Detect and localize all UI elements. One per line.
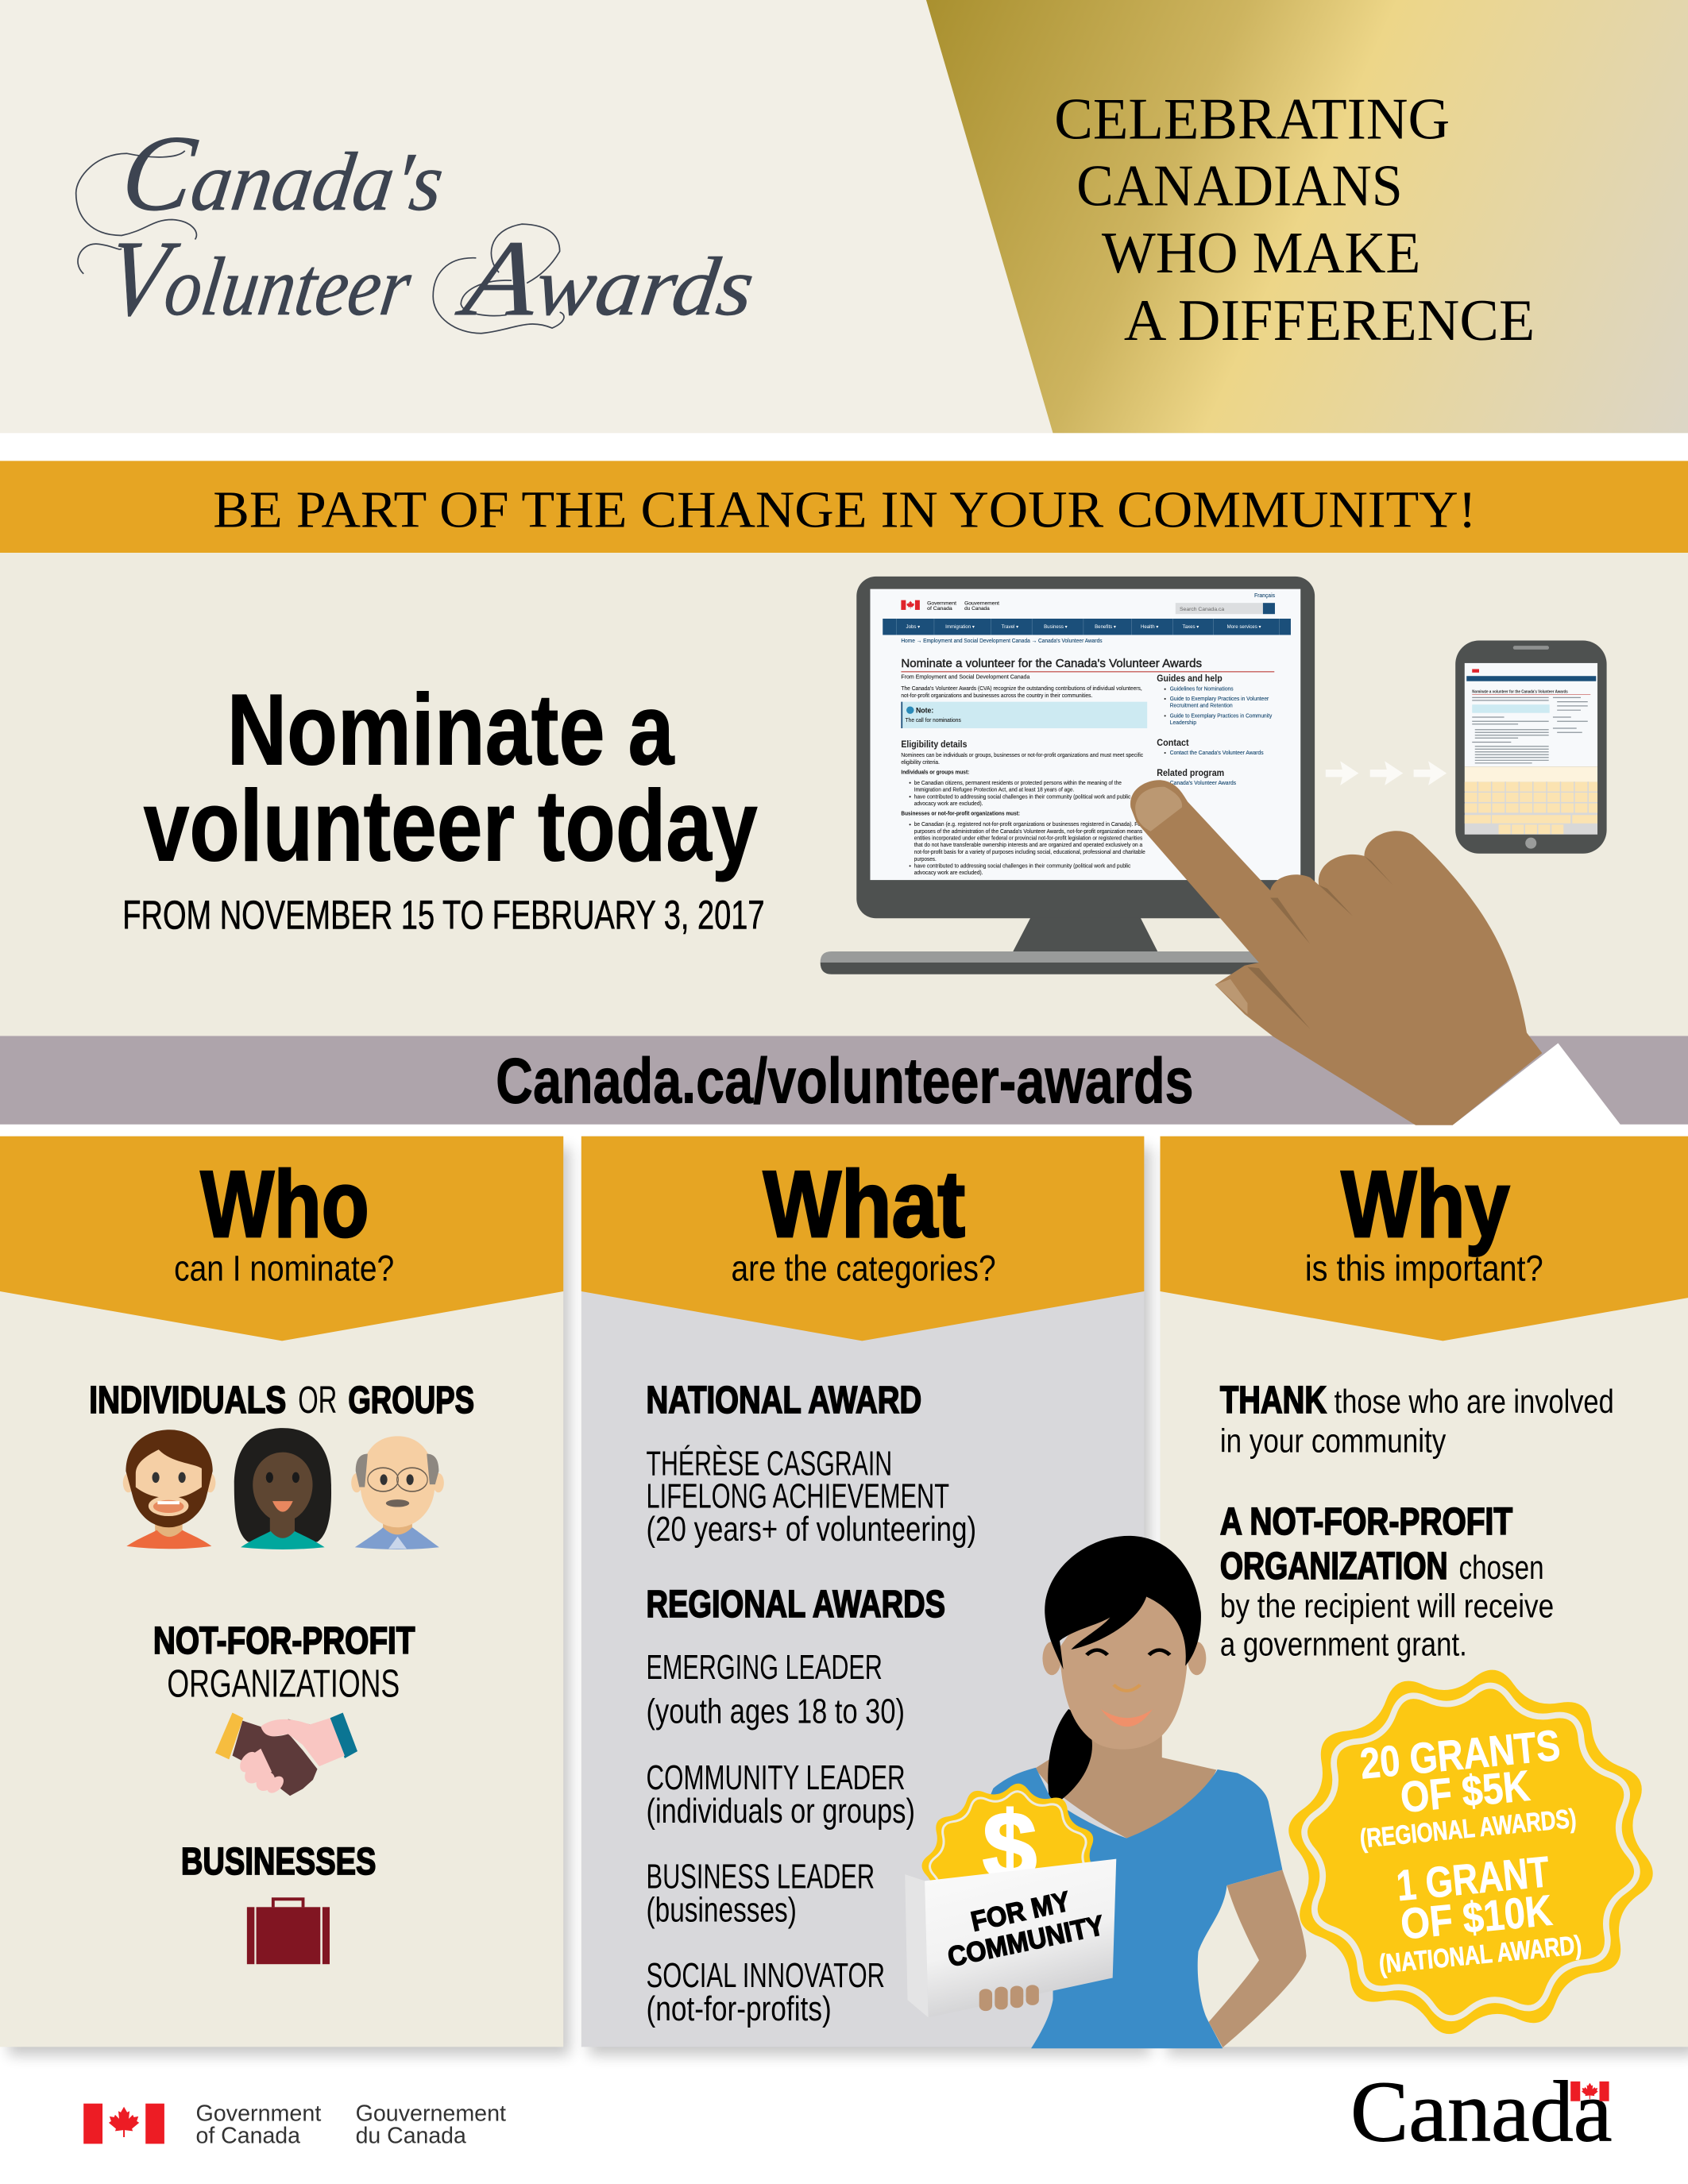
web page screenshot: that do not have transferable ownership interests and are organized and operated exclusively on a [914, 841, 1143, 848]
web page screenshot: Travel ▾ [1002, 624, 1018, 630]
web page screenshot: advocacy work are excluded). [914, 869, 983, 876]
hair [1045, 1536, 1201, 1669]
text: 1 grant of 10K: 1 GRANT [1394, 1847, 1551, 1910]
web page screenshot: entities incorporated under either federal or provincial not-for-profit legislation or registered charities [914, 834, 1143, 841]
text: businesses: BUSINESSES [181, 1841, 376, 1883]
text: 20 grants of 5K [1358, 1721, 1578, 1854]
web page screenshot: advocacy work are excluded). [914, 800, 983, 807]
web page screenshot [870, 589, 1300, 880]
text: regional awards: REGIONAL AWARDS [647, 1584, 945, 1626]
web page screenshot: purposes of the administration of the Canada's Volunteer Awards, not-for-profit organization means [914, 828, 1143, 835]
panel: why [1160, 1136, 1688, 2055]
text: not-for-profit organizations: NOT-FOR-PROFIT [153, 1620, 415, 1662]
web page screenshot: Canada's Volunteer Awards [1170, 779, 1236, 786]
text: national award: NATIONAL AWARD [647, 1379, 921, 1422]
tagline: celebrating Canadians: CANADIANS [1076, 153, 1403, 218]
gift bag [905, 1859, 1116, 2017]
text: regional awards: (businesses) [647, 1892, 797, 1930]
subheading: can I nominate: can I nominate? [174, 1248, 394, 1289]
icon: bearded man [123, 1430, 215, 1549]
band: website address: Canada.ca/volunteer-awards [496, 1046, 1194, 1117]
eyes [1087, 1650, 1170, 1655]
web page screenshot: The call for nominations [906, 716, 961, 723]
web page screenshot: Related program [1157, 769, 1224, 778]
web page screenshot: Government [927, 602, 956, 607]
panel: header banner [0, 0, 1688, 433]
nose [1114, 1684, 1140, 1691]
text: not-for-profit organizations: ORGANIZATIONS [167, 1663, 400, 1706]
text: individuals or groups: OR [298, 1379, 337, 1422]
arrows: monitor to phone [1326, 761, 1447, 785]
text: not-for-profit grant: ORGANIZATION [1220, 1545, 1448, 1588]
web page screenshot: Guides and help [1157, 674, 1223, 684]
web page screenshot: Business ▾ [1044, 624, 1068, 630]
web page screenshot: Home → Employment and Social Development Canada → Canada's Volunteer Awards [901, 637, 1103, 644]
web page screenshot: Businesses or not-for-profit organizations must: [901, 810, 1020, 817]
web page screenshot: Recruitment and Retention [1170, 702, 1233, 709]
icon: woman with dark hair [234, 1428, 331, 1549]
band: website address [0, 1036, 1688, 1125]
web page screenshot: eligibility criteria. [901, 758, 940, 766]
text: government names: of Canada [196, 2123, 300, 2148]
web page screenshot: du Canada [964, 607, 990, 612]
banner: be part of the change [0, 461, 1688, 553]
web page screenshot: not-for-profit organizations and businesses across the country in their communities. [901, 692, 1092, 699]
coin badge with dollar sign [914, 1776, 1108, 1970]
web page screenshot: Health ▾ [1141, 624, 1158, 630]
icons: three faces [123, 1428, 444, 1549]
text: not-for-profit grant [1220, 1501, 1554, 1663]
icon: handshake [215, 1712, 357, 1796]
text: national award: THÉRÈSE CASGRAIN [647, 1445, 892, 1483]
text: national award: (20 years+ of volunteering) [647, 1511, 976, 1549]
footer: Government of Canada signature [83, 2101, 506, 2148]
web page screenshot: have contributed to addressing social challenges in their community (political work and public [914, 793, 1131, 800]
panel: who [0, 1136, 570, 2055]
web page screenshot: Contact [1157, 739, 1189, 748]
illustration: pointing hand [1130, 780, 1620, 1125]
text: individuals or groups: INDIVIDUALS [89, 1379, 286, 1422]
text: regional awards: BUSINESS LEADER [647, 1858, 875, 1896]
web page screenshot: Guide to Exemplary Practices in Volunteer [1170, 695, 1269, 702]
right ear [1188, 1642, 1206, 1675]
illustration: smartphone: Nominate a volunteer for the Canada's Volunteer Awards [1472, 689, 1568, 694]
text: thank those involved: those who are involved [1335, 1383, 1614, 1420]
heading: nominate a volunteer today: volunteer today [144, 770, 758, 882]
fingers [979, 1985, 1039, 2011]
web page screenshot: Gouvernement [964, 602, 999, 607]
web page screenshot: Taxes ▾ [1183, 624, 1199, 630]
heading: who: Who [200, 1152, 369, 1257]
text: 20 grants of 5K: (REGIONAL AWARDS) [1358, 1804, 1578, 1854]
blue shirt [952, 1768, 1282, 2048]
illustration: smartphone [1455, 641, 1607, 854]
text: regional awards: (not-for-profits) [647, 1990, 832, 2028]
heading: nominate a volunteer today: Nominate a [227, 673, 675, 786]
web page screenshot: Nominees can be individuals or groups, businesses or not-for-profit organizations and must meet specific [901, 751, 1143, 758]
web page screenshot: Jobs ▾ [906, 624, 920, 630]
text: individuals or groups: GROUPS [348, 1379, 474, 1422]
text: national award [647, 1379, 976, 1549]
web page screenshot: be Canadian citizens, permanent residents or protected persons within the meaning of the [914, 779, 1122, 786]
tagline: celebrating Canadians [1054, 86, 1535, 353]
text: regional awards: (individuals or groups) [647, 1792, 915, 1831]
web page screenshot: Immigration ▾ [945, 624, 975, 630]
left ear [1042, 1642, 1061, 1675]
text: regional awards: EMERGING LEADER [647, 1649, 883, 1687]
text: regional awards: (youth ages 18 to 30) [647, 1693, 905, 1731]
heading: why: Why [1341, 1152, 1510, 1257]
text: 1 grant of 10K [1377, 1847, 1583, 1979]
icon: briefcase [247, 1897, 330, 1964]
web page screenshot: Guidelines for Nominations [1170, 685, 1234, 693]
illustration: desktop monitor with web page [821, 577, 1315, 974]
web page screenshot: Nominate a volunteer for the Canada's Volunteer Awards [901, 658, 1202, 670]
web page screenshot: Benefits ▾ [1095, 624, 1116, 630]
subheading: is this important: is this important? [1305, 1248, 1543, 1289]
footer: Canada wordmark: Canada [1350, 2064, 1613, 2160]
web page screenshot: Immigration and Refugee Protection Act, and at least 18 years of age. [914, 786, 1074, 793]
banner: be part of the change: BE PART OF THE CHANGE IN YOUR COMMUNITY! [213, 480, 1476, 538]
text: regional awards: COMMUNITY LEADER [647, 1759, 906, 1797]
text: thank those involved [1220, 1379, 1614, 1459]
heading: nominate a volunteer today [144, 673, 758, 882]
web page screenshot: Leadership [1170, 719, 1196, 726]
tagline: celebrating Canadians: WHO MAKE [1102, 220, 1420, 285]
subheading: are the categories: are the categories? [731, 1248, 996, 1289]
text: not-for-profit grant: a government grant. [1220, 1626, 1467, 1663]
arm [1209, 1870, 1306, 2047]
text: not-for-profit grant: chosen [1459, 1549, 1544, 1586]
web page screenshot: of Canada [927, 607, 953, 612]
web page screenshot: More services ▾ [1227, 624, 1261, 630]
icon: wordmark flag [1570, 2082, 1609, 2101]
text: thank those involved: in your community [1220, 1422, 1446, 1459]
title: Canada's Volunteer Awards [76, 113, 763, 338]
title: Canada's Volunteer Awards: Awards [451, 218, 763, 338]
text: government names: du Canada [356, 2123, 466, 2148]
bag label: FOR MY [968, 1885, 1073, 1938]
title: Canada's Volunteer Awards: Volunteer [100, 218, 420, 338]
tagline: celebrating Canadians: CELEBRATING [1054, 86, 1450, 151]
web page screenshot: Eligibility details [901, 740, 967, 750]
heading: what: What [763, 1152, 965, 1257]
web page screenshot: Note: [916, 706, 933, 714]
smile [1101, 1709, 1153, 1727]
title: Canada's Volunteer Awards: Canada's [115, 113, 452, 233]
text: regional awards [647, 1584, 945, 2028]
web page screenshot: The Canada's Volunteer Awards (CVA) recognize the outstanding contributions of individual volunteers, [901, 685, 1142, 692]
text: 1 grant of 10K: (NATIONAL AWARD) [1377, 1931, 1583, 1979]
text: not-for-profit grant: A NOT-FOR-PROFIT [1220, 1501, 1512, 1543]
text: government names: Government [196, 2101, 321, 2126]
web page screenshot: Individuals or groups must: [901, 768, 969, 775]
web page screenshot: Français [1254, 592, 1275, 599]
badge: grant amounts [1265, 1646, 1677, 2058]
text: 20 grants of 5K: 20 GRANTS [1358, 1721, 1562, 1788]
bag label: COMMUNITY [945, 1910, 1107, 1973]
panel: what [581, 1136, 1150, 2055]
text: regional awards: SOCIAL INNOVATOR [647, 1957, 885, 1995]
text: 20 grants of 5K: OF $5K [1398, 1761, 1532, 1822]
text: not-for-profit organizations [153, 1620, 415, 1706]
text: government names: Gouvernement [356, 2101, 506, 2126]
text: national award: LIFELONG ACHIEVEMENT [647, 1478, 949, 1516]
neck and chest [1035, 1731, 1216, 1839]
panel: nominate section background [0, 553, 1688, 1036]
ponytail [1048, 1709, 1092, 1800]
web page screenshot: From Employment and Social Development Canada [901, 673, 1030, 680]
web page screenshot: purposes. [914, 855, 937, 862]
coin badge with dollar sign: $ [983, 1792, 1037, 1901]
text: not-for-profit grant: by the recipient will receive [1220, 1588, 1554, 1625]
icon: Canadian flag [83, 2104, 164, 2143]
text: individuals or groups [89, 1379, 474, 1422]
web page screenshot: not-for-profit basis for a variety of purposes including social, educational, professional and charitable [914, 848, 1145, 855]
web page screenshot: Search Canada.ca [1180, 607, 1225, 612]
text: government names [196, 2101, 506, 2148]
illustration: woman holding bag [905, 1536, 1306, 2048]
web page screenshot: Guide to Exemplary Practices in Community [1170, 712, 1273, 719]
web page screenshot: be Canadian (e.g. registered not-for-profit organizations or businesses registered in Canada). For [914, 820, 1143, 828]
text: 1 grant of 10K: OF $10K [1399, 1886, 1555, 1949]
text: nomination dates: FROM NOVEMBER 15 TO FEBRUARY 3, 2017 [122, 892, 765, 937]
web page screenshot: Contact the Canada's Volunteer Awards [1170, 749, 1264, 756]
shirt cuff [1453, 1043, 1620, 1125]
text: thank those involved: THANK [1220, 1379, 1327, 1422]
tagline: celebrating Canadians: A DIFFERENCE [1124, 287, 1535, 353]
web page screenshot: have contributed to addressing social challenges in their community (political work and public [914, 862, 1131, 869]
face [1060, 1596, 1188, 1750]
icon: older man with glasses [351, 1436, 444, 1549]
